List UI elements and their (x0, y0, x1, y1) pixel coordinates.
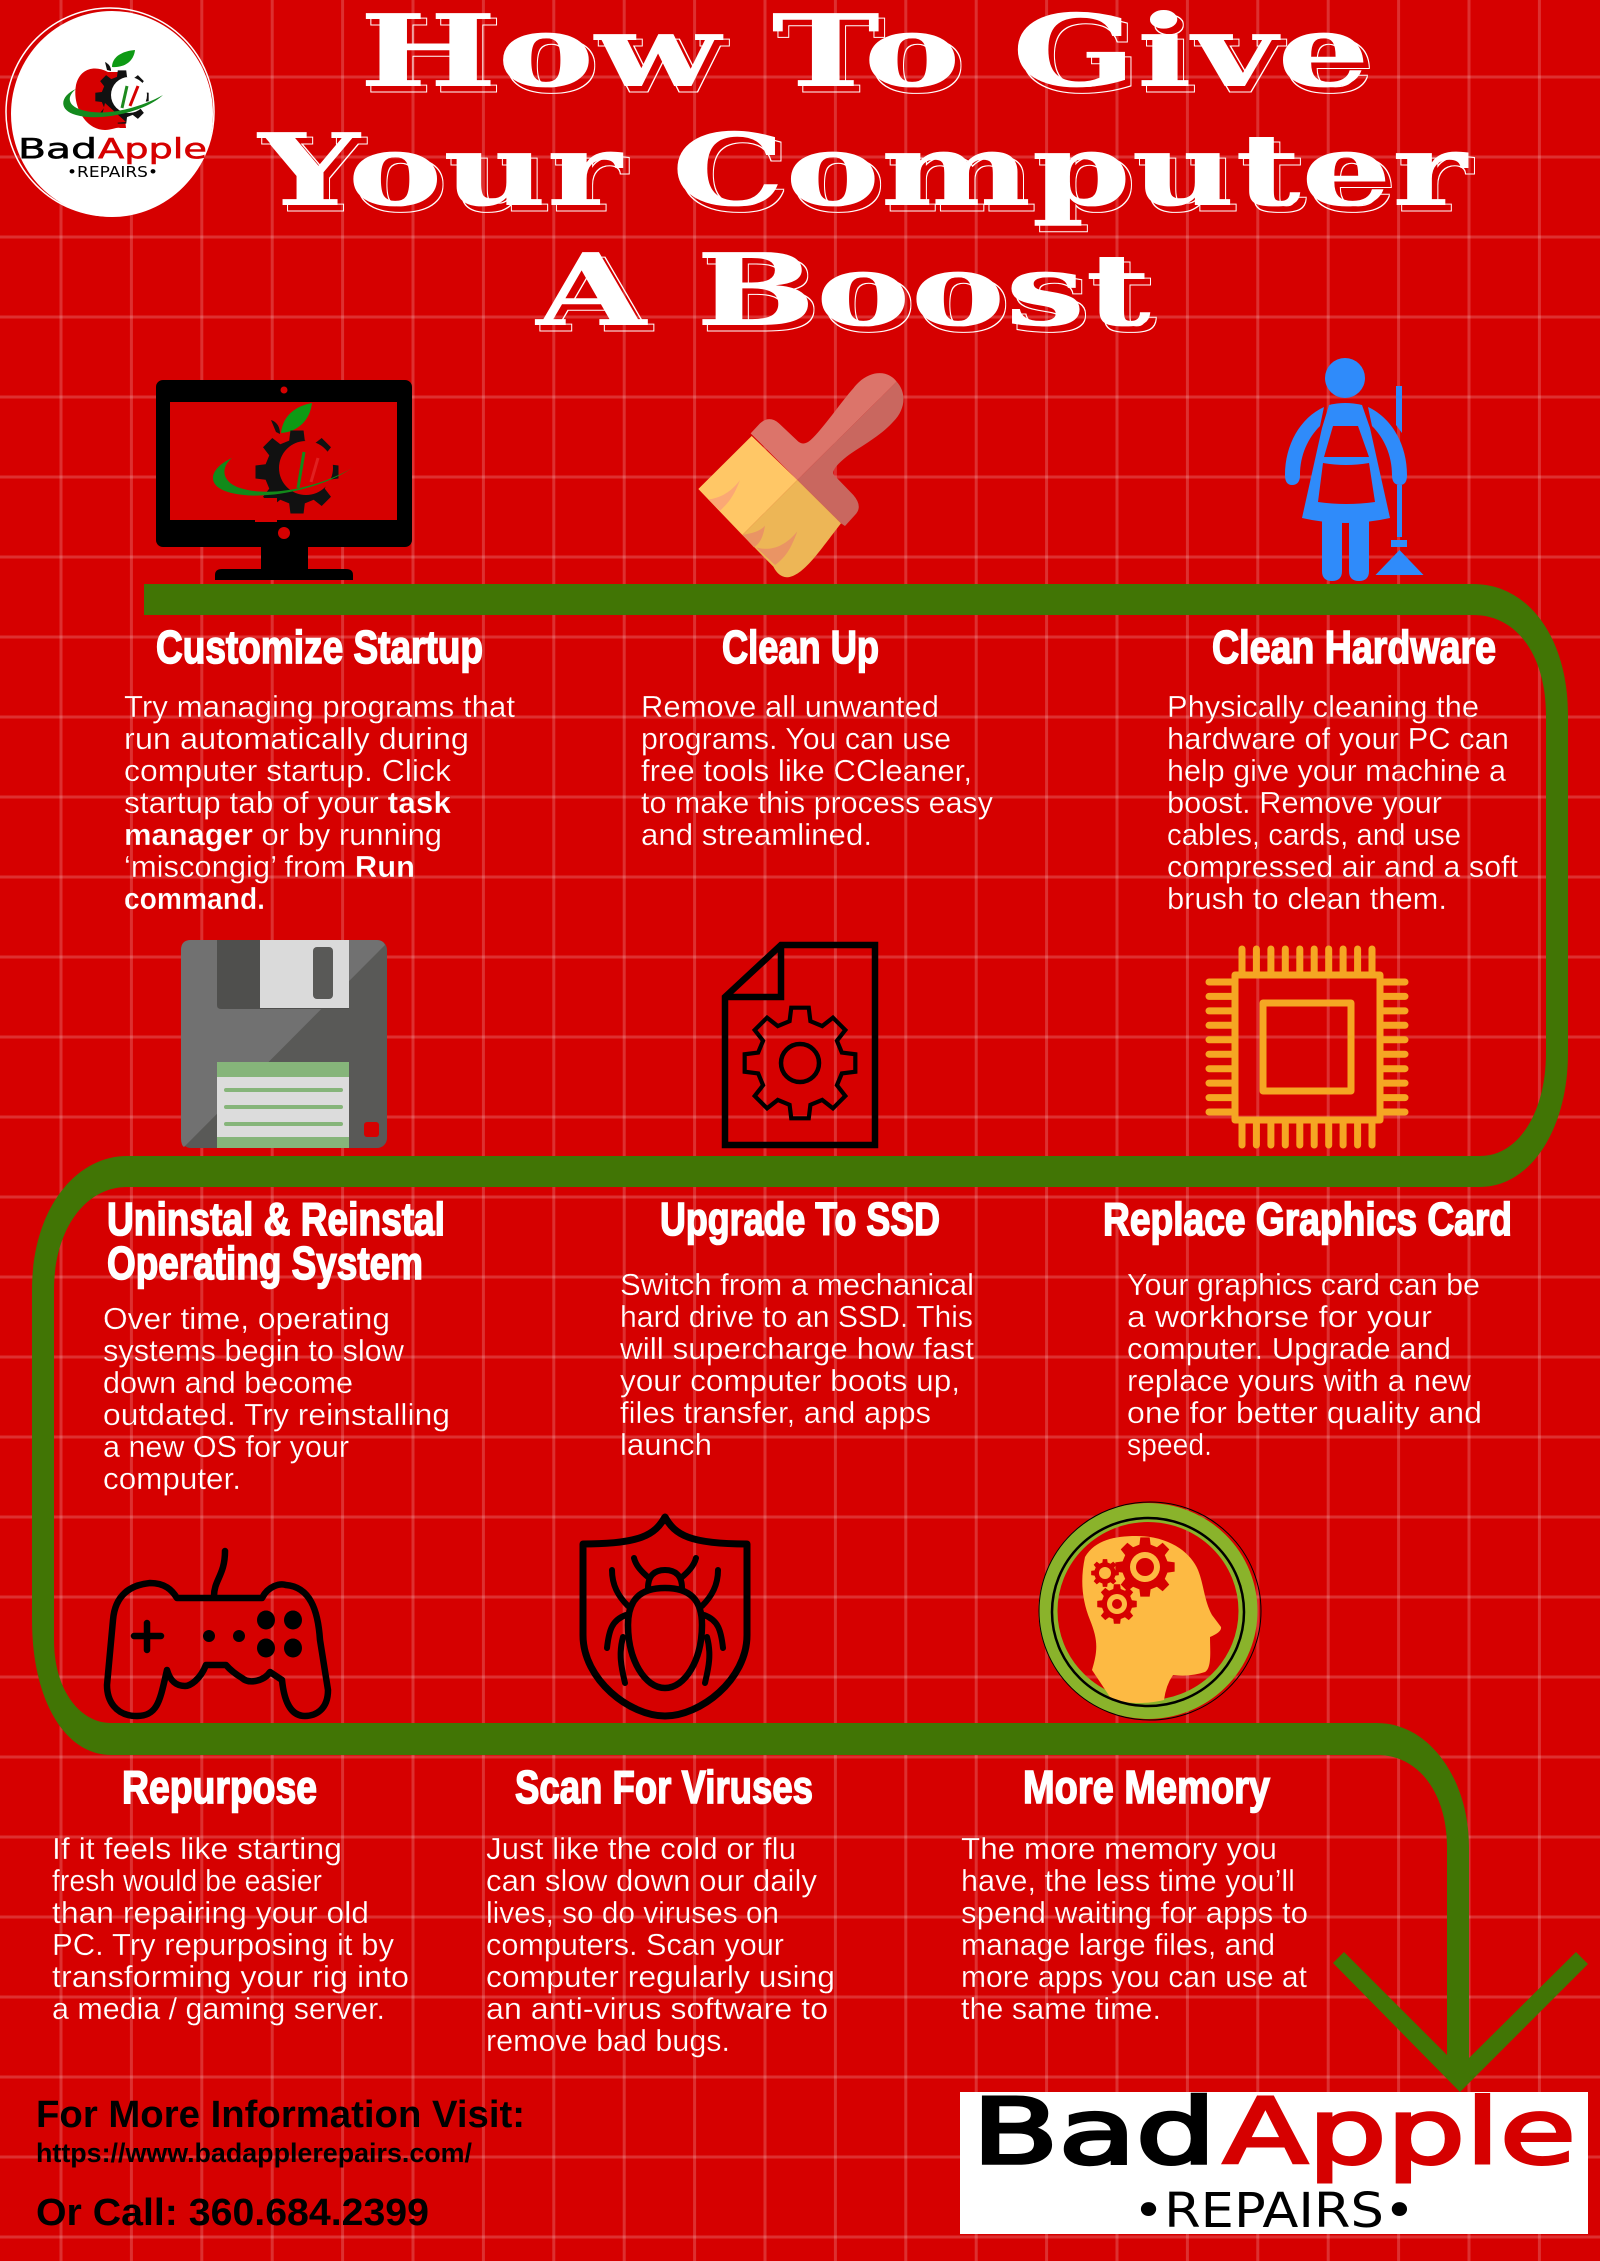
heading: Clean Up (722, 621, 879, 673)
body text: and streamlined. (641, 817, 872, 852)
heading: Uninstal & Reinstal (107, 1193, 445, 1245)
body text: free tools like CCleaner, (641, 753, 972, 788)
icon: floppy disk (181, 940, 387, 1148)
body text: one for better quality and (1127, 1395, 1482, 1430)
icon: maid with broom (1285, 358, 1424, 581)
body text (641, 689, 993, 852)
logo badge (6, 8, 214, 217)
panel: clean hardware (1167, 621, 1518, 916)
body text: Just like the cold or flu (486, 1831, 796, 1866)
body text: manage large files, and (961, 1927, 1275, 1962)
body text: If it feels like starting (52, 1831, 342, 1866)
body text: launch (620, 1427, 712, 1462)
body text: fresh would be easier (52, 1863, 322, 1898)
title: A Boost (535, 231, 1151, 349)
bottom logo: Apple (1223, 2080, 1576, 2185)
body text: Remove all unwanted (641, 689, 939, 724)
body text: a new OS for your (103, 1429, 349, 1464)
title: Your Computer (257, 111, 1469, 229)
body text: the same time. (961, 1991, 1161, 2026)
logo badge: Apple (98, 132, 207, 165)
heading: Scan For Viruses (515, 1761, 813, 1813)
bottom logo: Bad (972, 2080, 1216, 2185)
bottom logo: •REPAIRS• (1133, 2183, 1415, 2239)
panel: uninstall and reinstall (103, 1193, 450, 1496)
body text: Switch from a mechanical (620, 1267, 974, 1302)
body text: an anti-virus software to (486, 1991, 828, 2026)
body text: systems begin to slow (103, 1333, 405, 1368)
body text: The more memory you (961, 1831, 1277, 1866)
heading: Customize Startup (156, 621, 483, 673)
body text: computer regularly using (486, 1959, 835, 1994)
body text: to make this process easy (641, 785, 993, 820)
body text: transforming your rig into (52, 1959, 409, 1994)
body text: than repairing your old (52, 1895, 369, 1930)
heading (107, 1193, 445, 1289)
body text: speed. (1127, 1427, 1212, 1462)
title (257, 0, 1469, 349)
body text: a workhorse for your (1127, 1299, 1432, 1334)
body text: help give your machine a (1167, 753, 1507, 788)
logo badge: Bad (18, 132, 97, 165)
bottom logo (960, 2080, 1588, 2239)
body text: Try managing programs that (124, 689, 515, 724)
heading: Operating System (107, 1237, 423, 1289)
icon: paint brush (698, 373, 903, 577)
body text: replace yours with a new (1127, 1363, 1472, 1398)
icon: game controller (107, 1551, 328, 1716)
body text: boost. Remove your (1167, 785, 1442, 820)
winding arrow (32, 584, 1588, 2092)
body text: spend waiting for apps to (961, 1895, 1308, 1930)
body text: PC. Try repurposing it by (52, 1927, 394, 1962)
body text: hard drive to an SSD. This (620, 1299, 973, 1334)
body text: can slow down our daily (486, 1863, 817, 1898)
contact info (36, 2094, 525, 2234)
body text: your computer boots up, (620, 1363, 960, 1398)
body text: run automatically during (124, 721, 469, 756)
contact info: For More Information Visit: (36, 2094, 525, 2136)
icon: head with gears (1039, 1502, 1261, 1720)
panel: upgrade to ssd (619, 1193, 974, 1462)
body text: more apps you can use at (961, 1959, 1307, 1994)
panel: clean up (641, 621, 993, 852)
body text: have, the less time you’ll (961, 1863, 1295, 1898)
logo badge: •REPAIRS• (67, 163, 158, 181)
panel: more memory (961, 1761, 1308, 2026)
heading: Replace Graphics Card (1103, 1193, 1512, 1245)
icon: bug on shield (583, 1517, 747, 1716)
body text (124, 689, 515, 916)
body text: programs. You can use (641, 721, 951, 756)
body text: startup tab of your task (124, 785, 452, 820)
panel: replace graphics card (1103, 1193, 1512, 1462)
body text: brush to clean them. (1167, 881, 1447, 916)
body text: computer. (103, 1461, 241, 1496)
body text: computer. Upgrade and (1127, 1331, 1451, 1366)
body text (103, 1301, 450, 1496)
body text: cables, cards, and use (1167, 817, 1461, 852)
body text: remove bad bugs. (486, 2023, 730, 2058)
body text: files transfer, and apps (620, 1395, 931, 1430)
body text (961, 1831, 1308, 2026)
heading: Clean Hardware (1212, 621, 1496, 673)
heading: Upgrade To SSD (660, 1193, 940, 1245)
body text (1127, 1267, 1482, 1462)
panel: repurpose (52, 1761, 409, 2026)
body text: Over time, operating (103, 1301, 390, 1336)
icon: cpu chip (1209, 949, 1405, 1145)
body text: lives, so do viruses on (486, 1895, 779, 1930)
panel: customize startup (124, 621, 515, 916)
body text: ‘miscongig’ from Run (124, 849, 415, 884)
icon: monitor (156, 380, 412, 580)
contact info: https://www.badapplerepairs.com/ (36, 2138, 472, 2168)
body text: will supercharge how fast (619, 1331, 974, 1366)
body text: command. (124, 881, 265, 916)
body text: outdated. Try reinstalling (103, 1397, 450, 1432)
body text: a media / gaming server. (52, 1991, 385, 2026)
body text: compressed air and a soft (1167, 849, 1518, 884)
body text: hardware of your PC can (1167, 721, 1509, 756)
body text: computer startup. Click (124, 753, 452, 788)
body text: Physically cleaning the (1167, 689, 1479, 724)
icon: document with gear (725, 945, 875, 1145)
heading: More Memory (1023, 1761, 1270, 1813)
body text (52, 1831, 409, 2026)
body text (1167, 689, 1518, 916)
body text: computers. Scan your (486, 1927, 784, 1962)
panel: scan for viruses (486, 1761, 835, 2058)
body text: manager or by running (124, 817, 442, 852)
body text (619, 1267, 974, 1462)
body text (486, 1831, 835, 2058)
body text: Your graphics card can be (1127, 1267, 1480, 1302)
body text: down and become (103, 1365, 353, 1400)
heading: Repurpose (122, 1761, 317, 1813)
contact info: Or Call: 360.684.2399 (36, 2192, 429, 2234)
